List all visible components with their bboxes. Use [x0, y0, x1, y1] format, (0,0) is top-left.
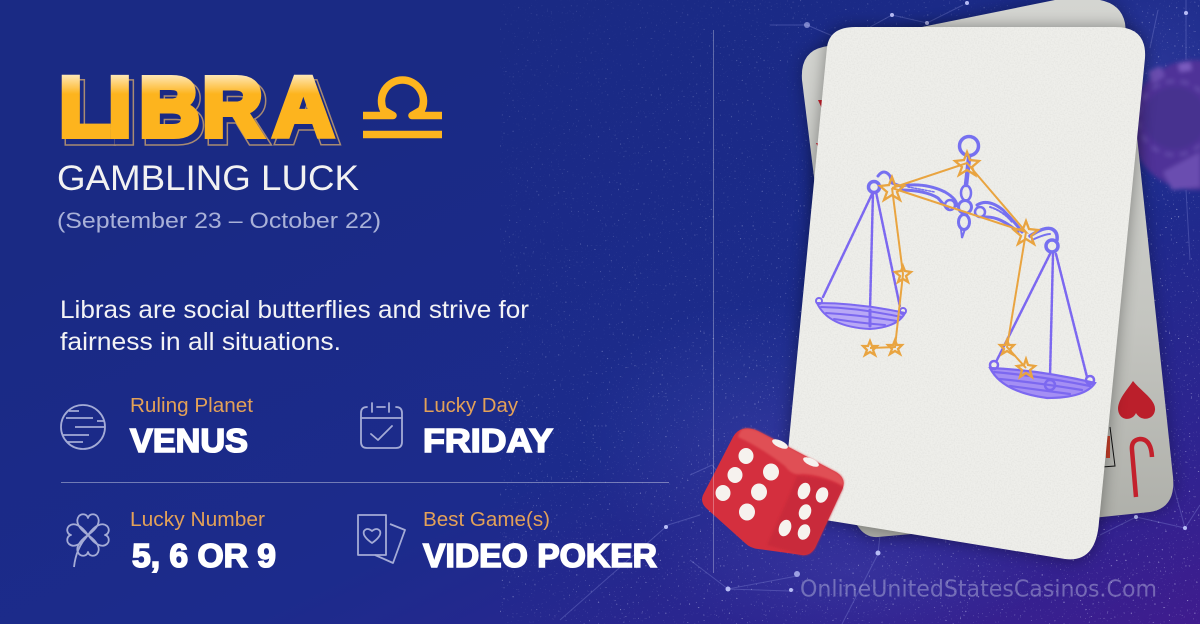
- description: fairness in all situations.: [60, 328, 341, 356]
- date range: (September 23 – October 22): [57, 208, 381, 233]
- front playing card: [782, 27, 1145, 559]
- info: best games: [358, 509, 657, 574]
- description: [60, 296, 529, 356]
- right pan: [990, 254, 1095, 398]
- icon: playing cards: [358, 515, 405, 563]
- icon: calendar: [361, 403, 402, 448]
- info: lucky day: Lucky Day: [423, 395, 518, 417]
- background: [390, 0, 1200, 624]
- vertical divider: [713, 30, 714, 573]
- title: LIBRA: LIBRA: [63, 66, 338, 160]
- scale beam and hanger: [868, 136, 1058, 252]
- icon: planet: [61, 405, 105, 449]
- description: Libras are social butterflies and strive for: [60, 296, 529, 324]
- info: lucky number: 5, 6 OR 9: [132, 537, 276, 574]
- info: best games: Best Game(s): [423, 509, 550, 531]
- info: lucky number: [67, 509, 276, 574]
- back playing cards: [802, 0, 1173, 537]
- subtitle: GAMBLING LUCK: [57, 159, 359, 198]
- horizontal divider: [61, 482, 669, 483]
- title: LIBRA: LIBRA: [59, 60, 334, 154]
- icon: libra symbol: [363, 80, 442, 134]
- info: ruling planet: [61, 395, 253, 459]
- icon: clover: [67, 514, 109, 567]
- scales illustration: [816, 136, 1095, 398]
- libra constellation: [863, 152, 1038, 377]
- watermark: OnlineUnitedStatesCasinos.Com: [800, 576, 1157, 602]
- poker chip: [1130, 60, 1200, 190]
- info: lucky day: FRIDAY: [423, 422, 553, 459]
- info: best games: VIDEO POKER: [423, 537, 657, 574]
- left pan: [816, 192, 906, 329]
- card pips: [816, 100, 1155, 497]
- red dice: [702, 428, 844, 555]
- info: ruling planet: VENUS: [130, 422, 248, 459]
- title: LIBRA: LIBRA: [63, 66, 338, 160]
- info: lucky day: [361, 395, 553, 459]
- info: lucky number: Lucky Number: [130, 509, 265, 531]
- info: ruling planet: Ruling Planet: [130, 395, 253, 417]
